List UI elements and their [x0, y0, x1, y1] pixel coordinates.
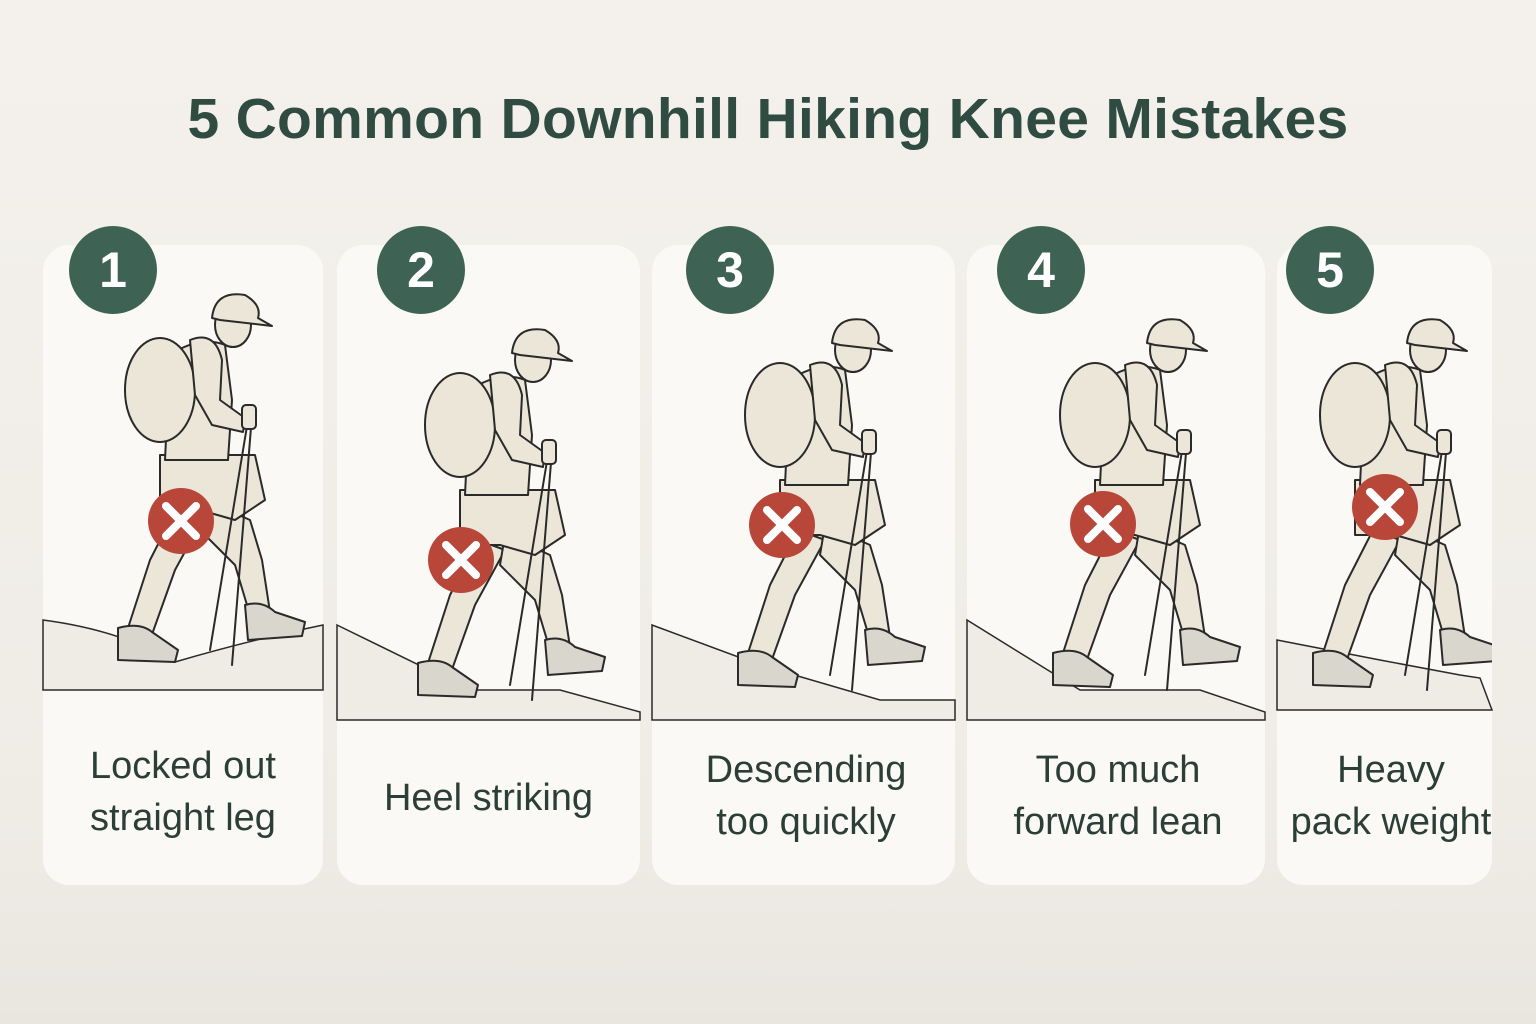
illustrations: [42, 293, 1493, 721]
badge 5: 5: [1316, 242, 1344, 298]
figure 5: [1313, 319, 1500, 690]
badge 3: 3: [716, 242, 744, 298]
badge 1: 1: [99, 242, 127, 298]
figure 2: [418, 329, 605, 700]
label 1: Locked out: [90, 745, 276, 787]
panel: card 4: [967, 245, 1265, 885]
label 1: [90, 745, 276, 839]
icon: x 2: [428, 527, 494, 593]
label 5: Heavy: [1337, 749, 1445, 791]
label 3: [706, 749, 906, 843]
label 3: too quickly: [716, 801, 896, 843]
badge 3: [686, 226, 774, 314]
figure 4: [1053, 319, 1240, 690]
icon: x 3: [749, 492, 815, 558]
panel: card 3: [652, 245, 955, 885]
label 3: Descending: [706, 749, 906, 791]
badge 5: [1286, 226, 1374, 314]
label 5: pack weight: [1291, 801, 1491, 843]
label 1: straight leg: [90, 797, 276, 839]
panel: card 2: [337, 245, 640, 885]
badge 2: 2: [407, 242, 435, 298]
figure 3: [738, 319, 925, 690]
icon: x 5: [1352, 474, 1418, 540]
label 4: forward lean: [1013, 801, 1223, 843]
label 5: [1291, 749, 1492, 843]
icon: x 4: [1070, 491, 1136, 557]
label 2: Heel striking: [384, 777, 593, 819]
badge 1: [69, 226, 157, 314]
badge 4: 4: [1027, 242, 1055, 298]
label 4: Too much: [1036, 749, 1200, 791]
icon: x 1: [148, 488, 214, 554]
panel: card 5: [1277, 245, 1492, 885]
title: 5 Common Downhill Hiking Knee Mistakes: [187, 87, 1349, 151]
badge 2: [377, 226, 465, 314]
ground slopes: [43, 620, 1492, 720]
badge 4: [997, 226, 1085, 314]
figure 1: [118, 294, 305, 665]
label 4: [1013, 749, 1223, 843]
panel: card 1: [43, 245, 323, 885]
